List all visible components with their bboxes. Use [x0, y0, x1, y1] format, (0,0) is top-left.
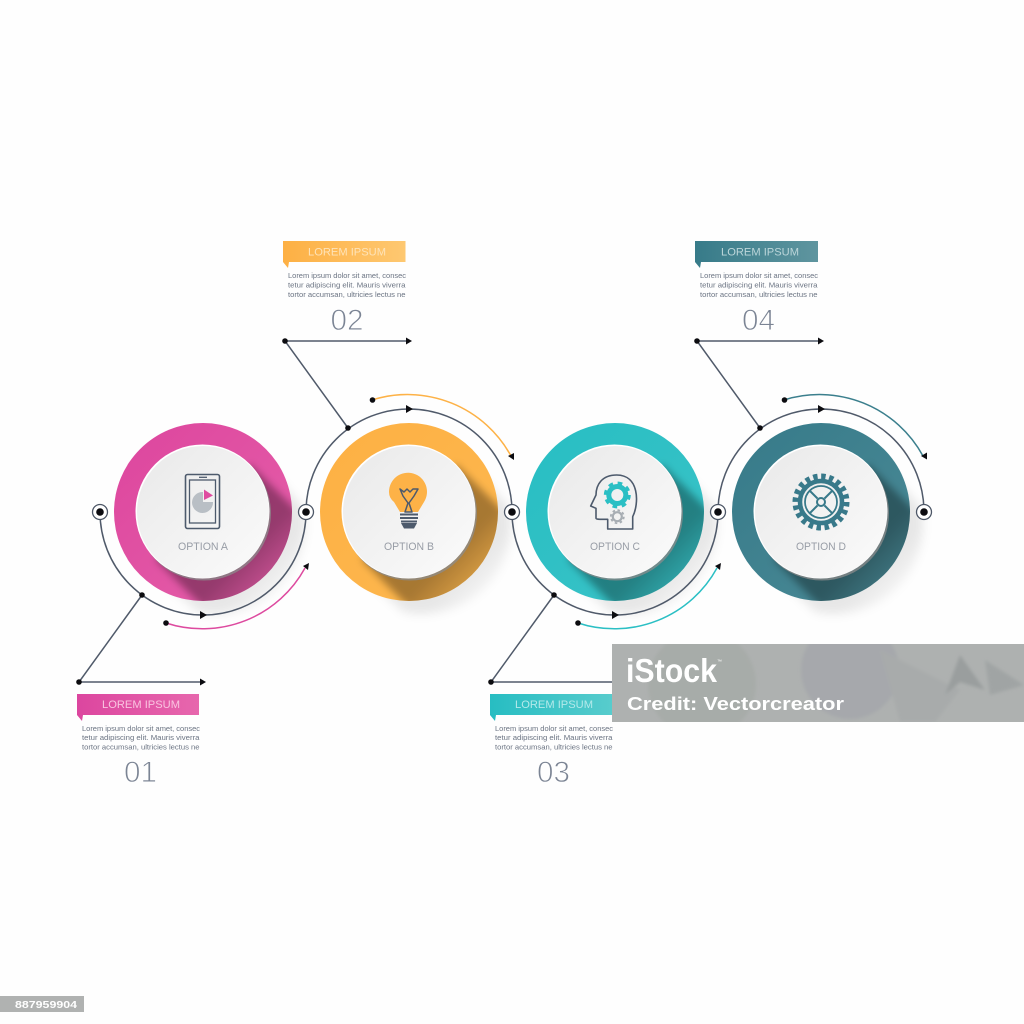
- callout 02: [283, 241, 406, 337]
- timeline direction arrows: [200, 405, 825, 619]
- callout 03: [490, 694, 613, 789]
- leader line 01: [76, 592, 206, 686]
- icon: light bulb: [389, 473, 427, 528]
- callout 01: tetur adipiscing elit. Mauris viverra: [82, 733, 200, 742]
- leader line 04: [694, 338, 824, 431]
- callout 01: [77, 694, 200, 789]
- icon: cog wheel: [796, 476, 846, 528]
- leader line 02: [282, 338, 412, 431]
- callout 03: tetur adipiscing elit. Mauris viverra: [495, 733, 613, 742]
- coloured arc arrow D: [782, 395, 927, 460]
- callout 01: 01: [124, 756, 157, 789]
- circle: option B: [320, 423, 512, 616]
- image id badge: 887959904: [15, 999, 77, 1011]
- circle: option A: [114, 423, 306, 616]
- callout 04: [695, 241, 818, 337]
- callout 04: 04: [742, 304, 775, 337]
- label: option B: OPTION B: [384, 541, 434, 553]
- callout 03: Lorem ipsum dolor sit amet, consec: [495, 724, 613, 733]
- callout 04: Lorem ipsum dolor sit amet, consec: [700, 271, 818, 280]
- timeline: wavy connecting arcs: [100, 409, 924, 615]
- watermark banner: iStock: [626, 652, 718, 689]
- callout 01: Lorem ipsum dolor sit amet, consec: [82, 724, 200, 733]
- callout 04: tetur adipiscing elit. Mauris viverra: [700, 280, 818, 290]
- callout 01: tortor accumsan, ultricies lectus ne: [82, 742, 200, 752]
- callout 03: 03: [537, 756, 570, 789]
- label: option D: OPTION D: [796, 541, 846, 553]
- callout 02: tortor accumsan, ultricies lectus ne: [288, 290, 406, 299]
- icon: head with gears: [591, 475, 637, 529]
- callout 02: 02: [330, 304, 364, 337]
- callout 03: LOREM IPSUM: [515, 699, 593, 711]
- watermark banner: Credit: Vectorcreator: [627, 694, 844, 714]
- coloured arc arrow B: [370, 395, 514, 460]
- callout 04: LOREM IPSUM: [721, 246, 799, 258]
- callout 04: tortor accumsan, ultricies lectus ne: [700, 290, 818, 299]
- label: option A: OPTION A: [178, 541, 229, 553]
- callout 03: tortor accumsan, ultricies lectus ne: [495, 742, 612, 752]
- coloured arc arrow C: [575, 563, 721, 629]
- callout 02: LOREM IPSUM: [308, 246, 386, 258]
- coloured arc arrow A: [163, 563, 309, 629]
- node markers on timeline: [92, 504, 932, 520]
- circle: option D: [732, 423, 924, 616]
- leader line 03: [488, 592, 612, 685]
- watermark banner: [612, 644, 1024, 722]
- label: option C: OPTION C: [590, 541, 640, 553]
- watermark banner: ™: [717, 659, 722, 665]
- callout 01: LOREM IPSUM: [102, 699, 180, 711]
- callout 02: Lorem ipsum dolor sit amet, consec: [288, 271, 406, 280]
- image id badge: [0, 996, 84, 1012]
- icon: tablet with pie chart: [186, 474, 220, 528]
- circle: option C: [526, 423, 718, 616]
- callout 02: tetur adipiscing elit. Mauris viverra: [288, 280, 406, 290]
